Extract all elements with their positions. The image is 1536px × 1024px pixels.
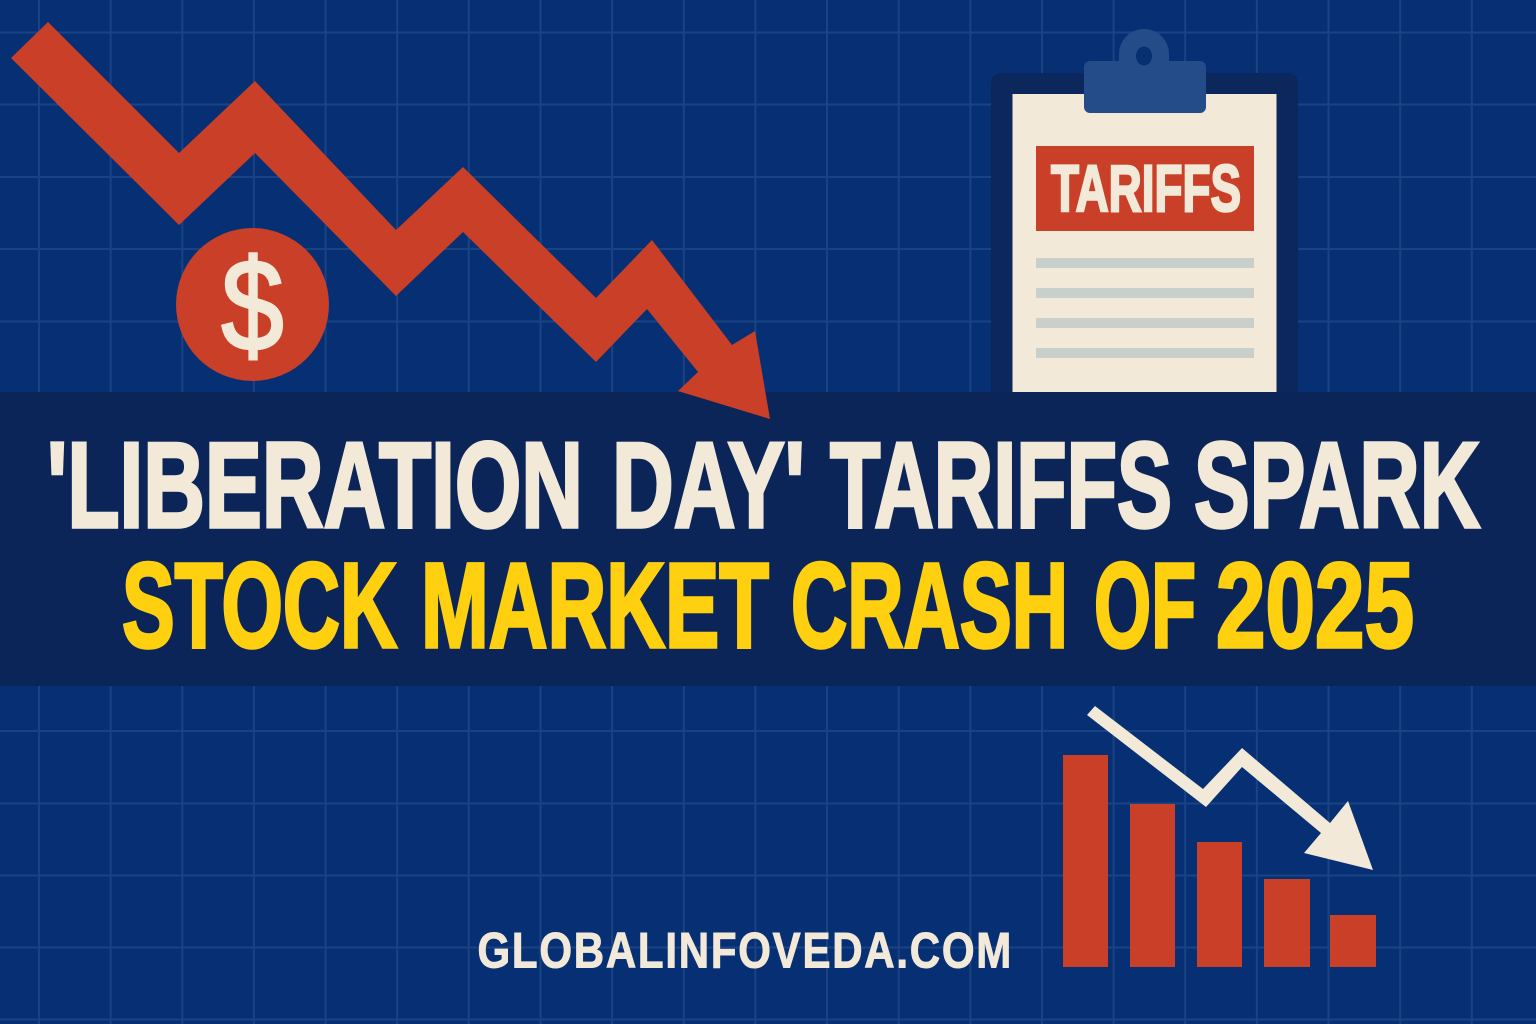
title line 1: DAY' (612, 417, 805, 553)
tariffs label: TARIFFS (1051, 151, 1241, 225)
title line 2: OF (1094, 537, 1196, 673)
clipboard paper (1012, 94, 1276, 394)
arrow: large falling red trend line (11, 22, 770, 419)
title line 1: 'LIBERATION (47, 417, 583, 553)
title line 2 (122, 537, 1414, 673)
title line 2: MARKET (421, 537, 769, 673)
title line 1 (47, 417, 1480, 553)
bar chart: declining bars (1063, 755, 1376, 967)
icon: tariffs clipboard (991, 29, 1298, 413)
title (47, 417, 1480, 673)
clipboard board (991, 73, 1298, 413)
title line 1: TARIFFS (830, 417, 1172, 553)
website credit: GLOBALINFOVEDA.COM (478, 922, 1013, 978)
arrow: small cream falling trend line (1087, 706, 1373, 870)
title line 2: 2025 (1216, 537, 1414, 673)
clipboard clip (1084, 29, 1206, 113)
tariffs label (1036, 146, 1254, 231)
title banner (0, 392, 1536, 686)
title line 2: STOCK (122, 537, 397, 673)
icon: dollar coin (176, 228, 329, 381)
icon: dollar coin: $ (221, 232, 284, 378)
title line 2: CRASH (791, 537, 1068, 673)
document text lines (1036, 258, 1254, 358)
